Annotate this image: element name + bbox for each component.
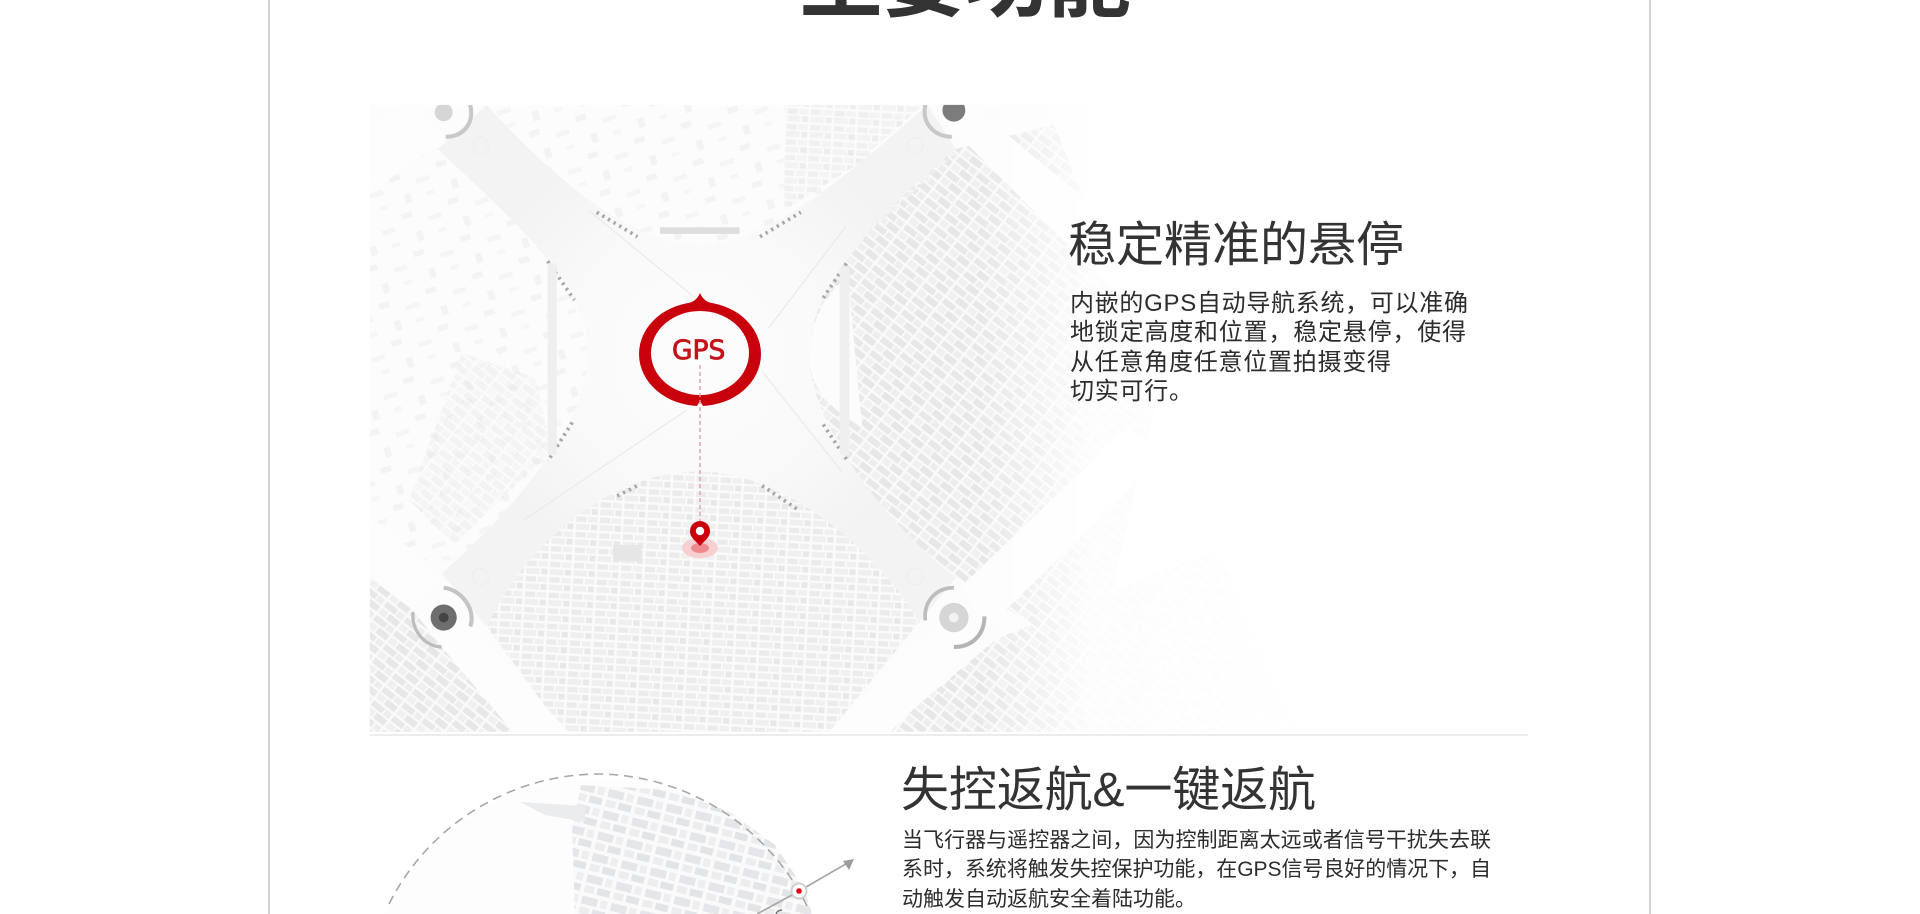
body seams [523,210,846,520]
dashed range circle [389,774,808,908]
propeller blades [389,136,1060,732]
failsafe point [792,884,806,898]
panel: return home map [385,774,854,914]
text block: hover description: 切实可行。 [1070,378,1193,405]
arrow [757,861,851,914]
text block: return home description: 当飞行器与遥控器之间，因为控制距离太远或者信号干扰失去联 [902,829,1491,852]
text block: hover description [1070,290,1468,405]
city map background [370,104,1064,732]
text block: return home description [902,829,1491,911]
icon: map pin [682,521,718,558]
battery rails [548,263,557,455]
drone body [438,105,956,627]
heading: return home: 失控返航&一键返航 [901,764,1316,817]
city blocks [572,785,812,914]
text block: hover description: 内嵌的GPS自动导航系统，可以准确 [1070,290,1468,317]
heading: hover: 稳定精准的悬停 [1068,219,1404,272]
panel: GPS hover drone image [370,104,1064,732]
icon: GPS ring marker [639,293,761,522]
page frame [268,0,1651,914]
text block: return home description: 系时，系统将触发失控保护功能，在GPS信号良好的情况下，自 [902,858,1491,881]
text block: return home description: 动触发自动返航安全着陆功能。 [902,888,1196,911]
text block: hover description: 地锁定高度和位置，稳定悬停，使得 [1070,319,1466,346]
motors [413,99,984,647]
text block: hover description: 从任意角度任意位置拍摄变得 [1070,349,1391,376]
vents [548,212,848,510]
dashed line [699,365,701,522]
panel divider [370,734,1528,736]
GPS label: GPS [672,335,725,366]
